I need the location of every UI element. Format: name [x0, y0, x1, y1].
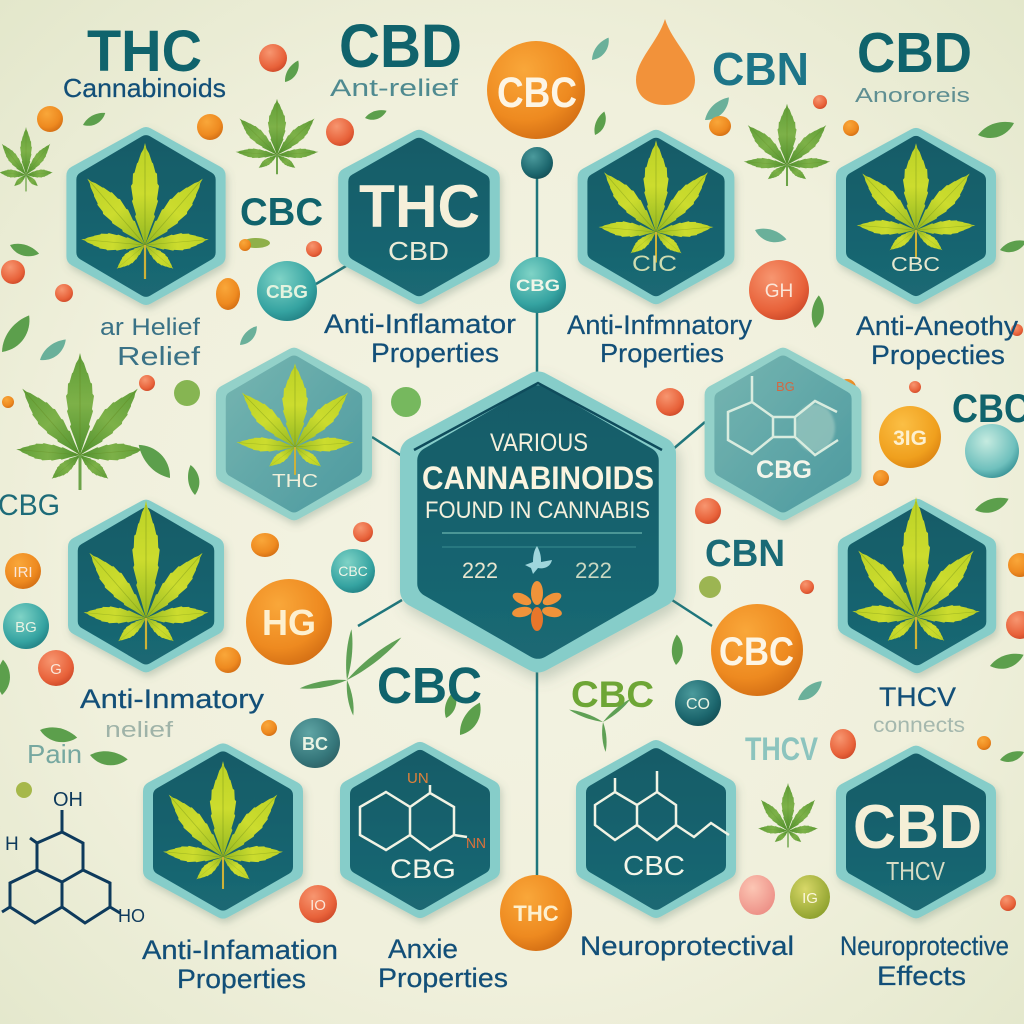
molecule: bottom left: OH [53, 789, 83, 811]
text: THCV connects: connects [873, 714, 965, 737]
ball: G red [38, 650, 74, 686]
ball: CBG left: CBG [266, 282, 308, 302]
hexagon: light molecule CBG [714, 358, 852, 510]
molecule: bottom left: HO [118, 906, 145, 926]
ball: GH red [749, 260, 809, 320]
text: Helief Relief: ar Helief [100, 314, 200, 341]
text: Anti-Aneothy Propecties: Anti-Aneothy [856, 311, 1019, 341]
hexagon: leaf top left [76, 137, 216, 295]
ball: CO dark teal [675, 680, 721, 726]
ball: G red: G [50, 661, 62, 678]
ball: BG teal [3, 603, 49, 649]
top heading: CBD Ant-relief [330, 12, 462, 102]
text: Anti-Infamation Properties [142, 935, 338, 994]
hexagon: leaf CBC top right [846, 138, 986, 294]
hexagon: leaf middle right [848, 497, 986, 663]
text: Anxie Properties [378, 934, 508, 993]
label: CBC large: CBC [377, 657, 482, 714]
text: Anti-Infmnatory Properties: Properties [600, 338, 724, 368]
hexagon: THC CBD: THC [359, 173, 480, 240]
ball: IG olive [790, 875, 830, 919]
ball: HG orange [246, 579, 332, 665]
text: Neuroprotective Effects: Effects [877, 961, 966, 991]
hexagon: molecule CBG: UN [407, 770, 429, 787]
ball: IO red [299, 885, 337, 923]
hexagon: light molecule CBG: BG [776, 379, 795, 394]
central hexagon: title: 222 [462, 558, 498, 583]
text: Anti-Aneothy Propecties: Propecties [871, 340, 1005, 370]
icon: orange drop [636, 19, 695, 105]
heading: CBN: CBN [712, 43, 809, 95]
hexagon: molecule CBG: NN [466, 835, 486, 852]
central hexagon: title [414, 383, 662, 655]
ball: pink [739, 875, 775, 915]
hexagon: molecule CBG [350, 752, 490, 908]
ball: BIG orange [879, 406, 941, 468]
text: Anti-Aneothy Propecties [856, 311, 1019, 370]
text: nelief: nelief [105, 717, 174, 742]
hexagon: THC CBD [348, 140, 490, 294]
text: Anti-Inflamator Properties: Properties [371, 338, 499, 368]
ball: pale teal [965, 424, 1019, 478]
hexagon: light leaf THC [226, 358, 362, 510]
ball: CBC top: CBC [497, 69, 577, 117]
narrow leaf cluster [299, 629, 403, 716]
top heading: THC Cannabinoids [63, 19, 226, 103]
label: THCV faded: THCV [745, 731, 819, 767]
top heading: CBD right [855, 21, 972, 107]
text: THCV connects [873, 682, 965, 737]
text: Pain: Pain [27, 739, 82, 769]
text: THCV connects: THCV [879, 682, 956, 712]
top heading: CBD Ant-relief: CBD [339, 12, 462, 80]
text: Anti-Infmnatory Properties: Anti-Infmnatory [567, 310, 752, 340]
ball: CBG centre [510, 257, 566, 313]
central hexagon: title: CANNABINOIDS [422, 460, 654, 496]
ball: HG orange: HG [262, 602, 316, 643]
central hexagon: title: VARIOUS [490, 429, 588, 457]
molecule: bottom left [2, 789, 145, 926]
ball: BC teal: BC [302, 734, 328, 754]
icon: blue sprout [525, 546, 552, 574]
hexagon: leaf CIC: CIC [632, 251, 677, 276]
text: Anti-Inflamator Properties: Anti-Inflamator [324, 309, 516, 339]
text: Helief Relief [100, 314, 201, 371]
hexagon: leaf middle left [78, 500, 214, 662]
node: small teal ball [521, 147, 553, 179]
hexagon: light leaf THC: THC [272, 471, 318, 491]
connector lines [316, 178, 712, 878]
ball: IO red: IO [310, 897, 326, 914]
hexagon: CBD THCV: CBD [853, 793, 982, 862]
text: Anti-Infamation Properties: Properties [177, 964, 306, 994]
hexagon: molecule CBC: CBC [623, 850, 685, 881]
ball: CBG left [257, 261, 317, 321]
text: Anti-Infamation Properties: Anti-Infamation [142, 935, 338, 965]
ball: BC teal [290, 718, 340, 768]
hexagon: CBD THCV: THCV [886, 856, 946, 886]
text: Neuroprotective Effects [840, 931, 1009, 991]
text: Neuroprotectival: Neuroprotectival [580, 931, 794, 961]
ball: IRI [5, 553, 41, 589]
text: Anti-Inflamator Properties [324, 309, 516, 368]
small leaf under CBC [568, 697, 632, 752]
ball: CO dark teal: CO [686, 696, 710, 713]
label: CBN middle: CBN [705, 533, 785, 575]
hexagon: leaf CIC [587, 140, 725, 294]
text: Anti-Inmatory: Anti-Inmatory [80, 684, 265, 714]
ball: CBC orange: CBC [719, 630, 794, 674]
top heading: CBD right: Anororeis [855, 85, 970, 107]
top heading: THC Cannabinoids: THC [87, 19, 202, 84]
hexagon: leaf CBC top right: CBC [891, 254, 940, 276]
top heading: CBD Ant-relief: Ant-relief [330, 75, 458, 102]
hexagon: molecule CBC [586, 750, 729, 908]
ball: THC orange bottom: THC [513, 901, 559, 926]
ball: IG olive: IG [802, 890, 818, 907]
text: Helief Relief: Relief [117, 341, 201, 371]
text: Anxie Properties: Properties [378, 963, 508, 993]
top heading: CBD right: CBD [857, 21, 972, 85]
label: CBC upper left: CBC [240, 191, 323, 234]
ball: BIG orange: 3IG [893, 427, 927, 450]
ball: BG teal: BG [15, 619, 37, 636]
text: Anti-Infmnatory Properties [567, 310, 752, 368]
text: Anxie Properties: Anxie [388, 934, 458, 964]
central hexagon: title: 222 [575, 558, 612, 583]
ball: CBC small [331, 549, 375, 593]
ball: CBC top [487, 41, 585, 139]
central hexagon: title: FOUND IN CANNABIS [425, 497, 650, 524]
hexagon: leaf bottom left [153, 753, 293, 909]
ball: IRI: IRI [13, 564, 33, 581]
top heading: THC Cannabinoids: Cannabinoids [63, 73, 226, 103]
molecule: bottom left: H [5, 834, 19, 855]
hexagon: THC CBD: CBD [388, 236, 449, 266]
ball: GH red: GH [765, 281, 793, 302]
hexagon: molecule CBG: CBG [390, 854, 456, 884]
ball: THC orange bottom [500, 875, 572, 951]
label: CBC green: CBC [571, 674, 654, 715]
ball: CBC orange [711, 604, 803, 696]
ball: CBC small: CBC [338, 563, 368, 579]
icon: orange flower [511, 581, 563, 631]
hexagon: light molecule CBG: CBG [756, 456, 812, 484]
ball: CBG centre: CBG [516, 276, 560, 295]
hexagon: CBD THCV [846, 756, 986, 908]
